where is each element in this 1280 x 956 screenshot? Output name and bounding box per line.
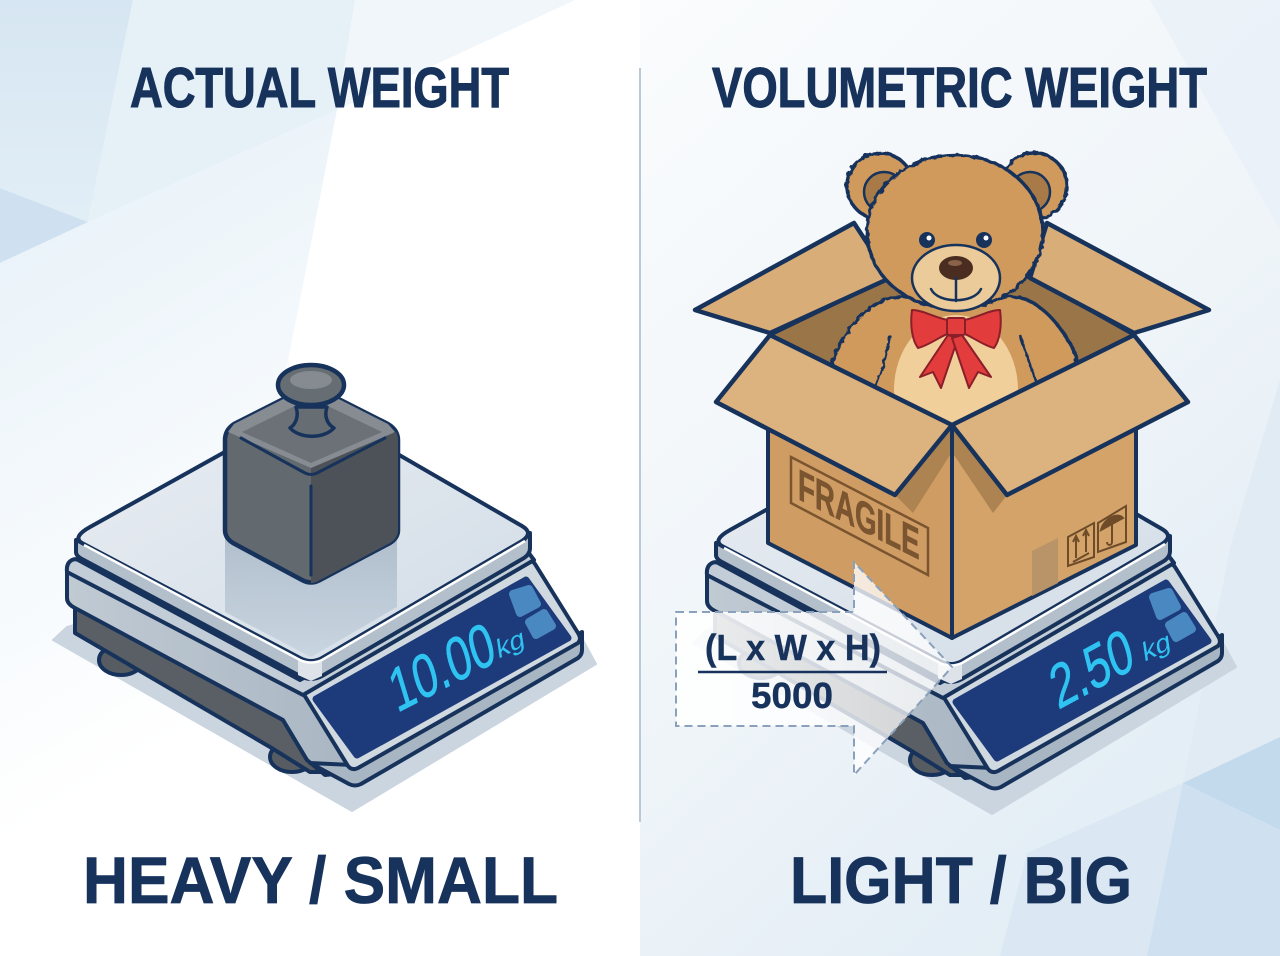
tape strip <box>1032 538 1058 596</box>
icon: keep dry umbrella <box>1098 506 1126 552</box>
formula arrow <box>676 562 952 775</box>
box faces <box>768 425 1136 638</box>
red bow <box>911 310 1001 388</box>
icon: this way up <box>1068 523 1094 566</box>
fragile label: FRAGILE <box>798 461 920 570</box>
bear body <box>832 297 1077 425</box>
display reading: 2.50 kg: kg <box>1140 625 1172 668</box>
display reading: 10.00 kg: 10.00 <box>381 609 502 726</box>
front flaps <box>716 335 1188 495</box>
title: actual weight: ACTUAL WEIGHT <box>130 56 509 120</box>
teddy bear <box>832 153 1077 465</box>
fold shadows <box>895 430 1007 513</box>
eyes <box>919 232 935 248</box>
numerator: (L x W x H) <box>705 627 881 668</box>
caption: heavy / small: HEAVY / SMALL <box>83 843 558 917</box>
ears <box>847 153 913 219</box>
display reading: 2.50 kg: 2.50 <box>1042 615 1141 723</box>
display reading: 10.00 kg: kg <box>494 622 526 665</box>
fraction bar <box>698 671 887 673</box>
divider <box>639 68 641 822</box>
box interior <box>770 250 1134 425</box>
weight reflection <box>225 533 397 657</box>
icon: cube weight <box>225 365 398 583</box>
nose and mouth <box>939 256 973 280</box>
head <box>867 155 1043 309</box>
denominator: 5000 <box>751 675 833 716</box>
illustration: scale with teddy bear in box <box>693 153 1236 814</box>
muzzle <box>912 245 1000 311</box>
illustration: scale with weight <box>53 365 596 811</box>
back flaps <box>695 223 1209 333</box>
caption: light / big: LIGHT / BIG <box>790 843 1132 917</box>
